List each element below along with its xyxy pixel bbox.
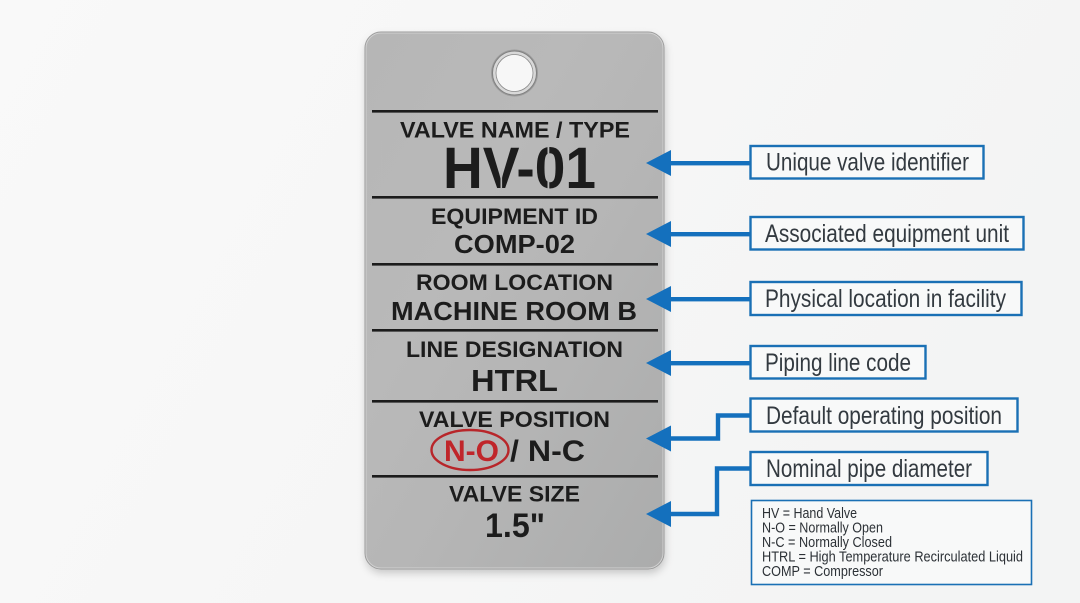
mounting hole [491,50,538,96]
field: line designation: LINE DESIGNATION [406,337,623,362]
legend box: N-O = Normally Open [762,520,883,536]
legend box: HV = Hand Valve [762,505,857,522]
legend box: COMP = Compressor [762,563,883,580]
legend box: N-C = Normally Closed [762,534,892,551]
field: valve position: N-O [444,435,499,468]
field: valve size: VALVE SIZE [449,482,580,506]
callout: equipment: Associated equipment unit [765,220,1009,248]
field: equipment id: EQUIPMENT ID [431,204,598,229]
metal valve tag [365,32,664,569]
field: valve position [419,407,610,470]
field: room location [391,270,637,326]
field: line designation [406,337,623,398]
callout: line code: Piping line code [765,349,911,377]
field: room location: MACHINE ROOM B [391,296,637,326]
callout: location: Physical location in facility [765,285,1006,313]
field: equipment id: COMP-02 [454,229,575,259]
callout: valve identifier: Unique valve identifier [766,148,969,176]
callout: position: Default operating position [766,402,1002,430]
divider lines [372,110,658,478]
field: valve position: VALVE POSITION [419,407,610,432]
arrow: size elbow [646,468,751,527]
legend box: HTRL = High Temperature Recirculated Liquid [762,548,1023,566]
field: equipment id [431,204,598,259]
arrow: equipment [646,221,751,247]
legend box [752,500,1032,584]
arrow: position elbow [646,416,751,452]
field: valve name [400,118,630,201]
field: valve size [449,482,580,545]
arrow: line code [646,350,751,376]
field: valve position: / N-C [510,435,585,468]
arrow: valve identifier [646,150,751,176]
field: room location: ROOM LOCATION [416,270,613,295]
arrow: location [646,286,751,312]
field: line designation: HTRL [471,363,558,398]
field: valve name: VALVE NAME / TYPE [400,118,630,142]
callout: size: Nominal pipe diameter [766,455,972,483]
field: valve size: 1.5" [485,507,545,545]
field: valve name: HV-01 [443,136,596,201]
